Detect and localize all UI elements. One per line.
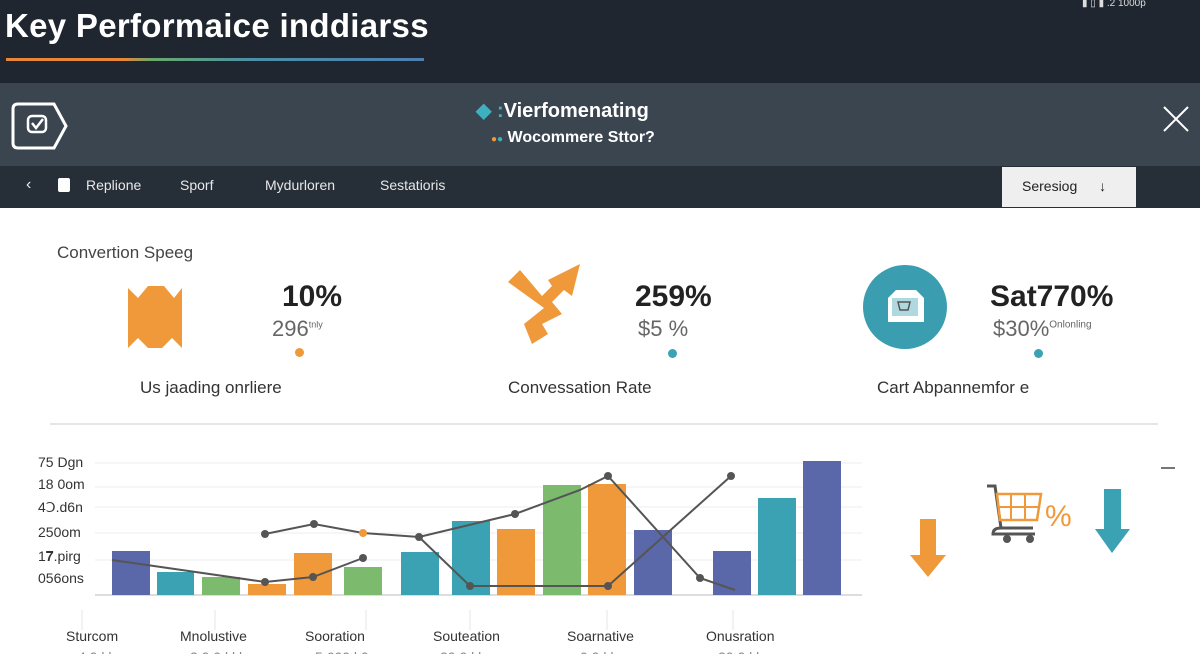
icon: cart circle — [863, 265, 947, 349]
section heading: Convertion Speeg — [57, 243, 193, 262]
nav bar: Sporf — [180, 177, 213, 193]
bar chart: 18 0om — [38, 476, 85, 492]
dash — [1161, 467, 1175, 469]
nav bar: Mydurloren — [265, 177, 335, 193]
nav bar: ‹ — [26, 176, 31, 193]
KPI 3: Sat770% — [990, 280, 1113, 313]
KPI 2: $5 % — [638, 316, 688, 341]
bar chart: Souteation — [433, 628, 500, 644]
bar chart: 75 Dgn — [38, 454, 83, 470]
icon: cart with percent — [987, 484, 1072, 543]
KPI 3: Cart Abpannemfor e — [877, 378, 1029, 397]
KPI 3 — [863, 265, 1113, 397]
KPI 2: Convessation Rate — [508, 378, 652, 397]
icon: close — [1163, 106, 1189, 132]
subheading: ●● Wocommere Sttor? — [491, 129, 655, 146]
title underline — [6, 58, 424, 61]
nav bar — [0, 166, 1200, 208]
KPI 3: $30%Onlonling — [993, 316, 1092, 341]
KPI 1: Us jaading onrliere — [140, 378, 282, 397]
icon: cart with percent: % — [1045, 500, 1072, 533]
icon: arrow — [508, 264, 580, 344]
bar chart: Soarnative — [567, 628, 634, 644]
KPI 2 — [508, 264, 712, 397]
bar chart: Sturcom — [66, 628, 118, 644]
title: Key Performaice inddiarss — [5, 7, 429, 44]
bar chart: Sooration — [305, 628, 365, 644]
heading: ◆ :Vierfomenating — [476, 100, 649, 122]
top header bar — [0, 0, 1200, 83]
nav bar: Replione — [86, 177, 141, 193]
bar chart: Mnolustive — [180, 628, 247, 644]
KPI 1 — [128, 280, 342, 397]
icon: store badge — [12, 102, 68, 150]
KPI 1: 10% — [282, 280, 342, 313]
bar chart: Onusration — [706, 628, 774, 644]
bar chart: 250om — [38, 524, 81, 540]
divider — [50, 423, 1158, 425]
icon: orange down arrow — [910, 519, 946, 577]
band: store header — [0, 83, 1200, 166]
icon: teal down arrow — [1095, 489, 1130, 553]
KPI 2: 259% — [635, 280, 712, 313]
button: Seresiog ↓ — [1022, 178, 1106, 194]
nav bar: Sestatioris — [380, 177, 445, 193]
KPI 1: 296tnly — [272, 316, 323, 341]
bar chart: 4Ↄ.d6n — [38, 499, 83, 515]
bar chart — [38, 454, 862, 654]
icon: bookmark — [128, 286, 182, 348]
button — [1002, 167, 1136, 207]
bar chart: 1𝟕.pirg — [38, 548, 81, 564]
bar chart: 056ons — [38, 570, 84, 586]
